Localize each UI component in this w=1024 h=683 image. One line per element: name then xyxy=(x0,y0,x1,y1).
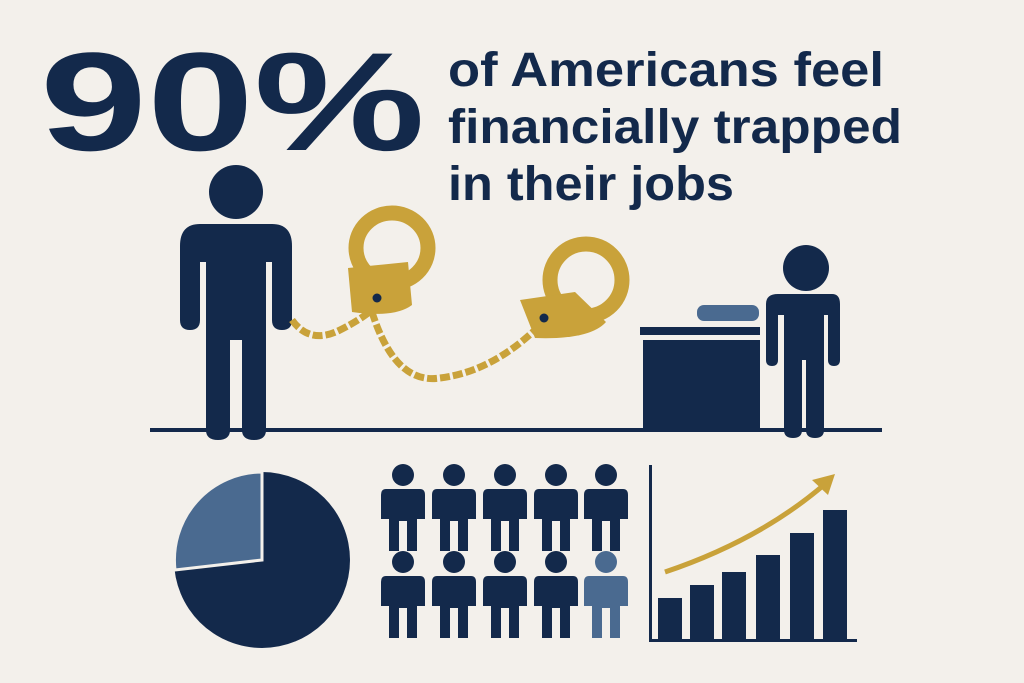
subtitle text: of Americans feel xyxy=(448,44,884,97)
subtitle text: in their jobs xyxy=(448,158,734,211)
chart: bar chart with rising arrow xyxy=(649,465,857,642)
subtitle text: financially trapped xyxy=(448,101,902,154)
chart: people grid 9 of 10 xyxy=(381,464,628,638)
title: 90%: 90% xyxy=(40,23,425,180)
ground line xyxy=(150,428,882,432)
chart: pie xyxy=(174,472,350,648)
icon: desk xyxy=(640,305,760,430)
subtitle text xyxy=(448,44,902,211)
icon: handcuffs xyxy=(292,213,622,379)
icon: worker at desk xyxy=(766,245,840,438)
icon: trapped person xyxy=(180,165,292,440)
